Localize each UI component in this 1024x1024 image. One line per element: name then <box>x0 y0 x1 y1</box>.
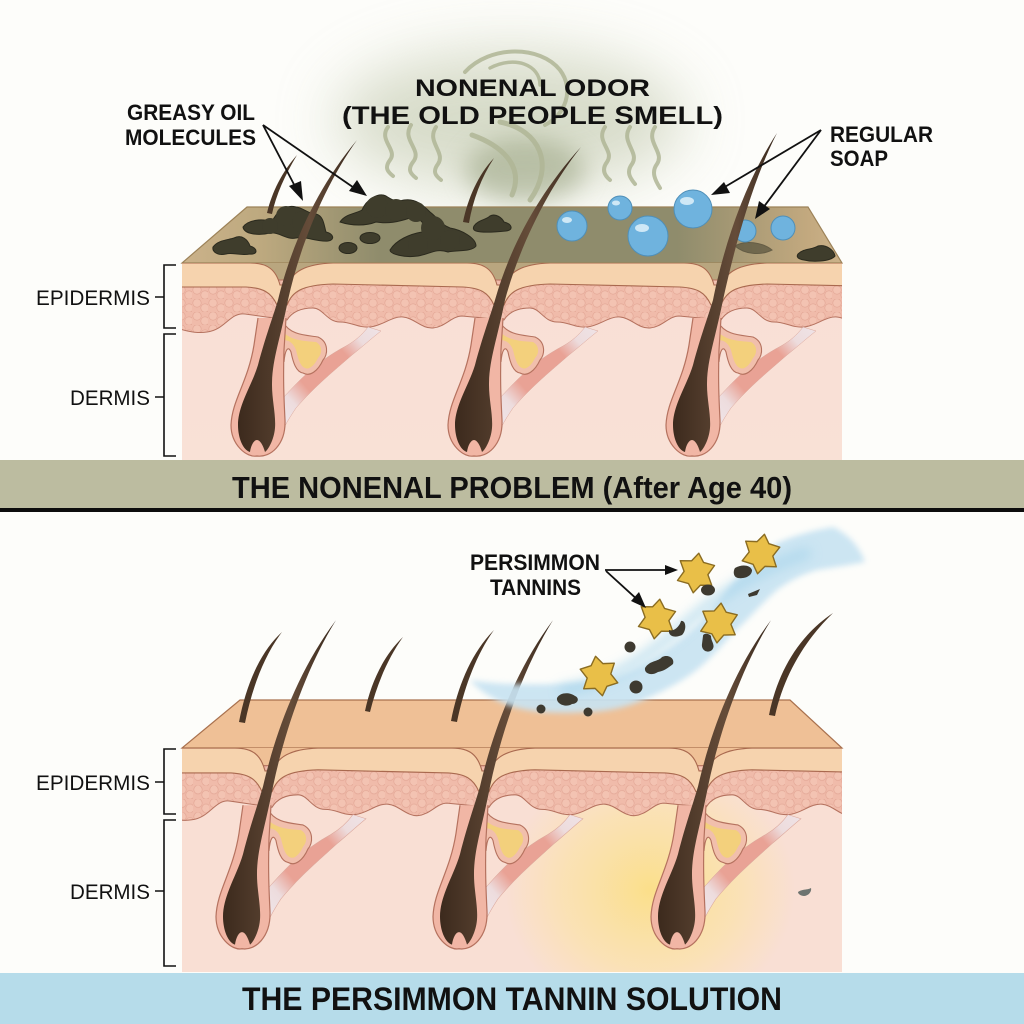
layer labels top: DERMIS <box>70 387 150 410</box>
label: regular soap: REGULAR <box>830 122 933 147</box>
odor haze <box>335 50 685 202</box>
skin top surface with oily film <box>182 207 842 303</box>
small hairs <box>267 155 494 223</box>
arrows: greasy oil <box>263 125 367 201</box>
tannin stars <box>578 531 782 699</box>
banner: the persimmon tannin solution: THE PERSIMMON TANNIN SOLUTION <box>242 981 782 1017</box>
oil blobs: greasy oil molecules <box>213 195 835 261</box>
dermis layer <box>182 785 842 972</box>
small hairs <box>239 613 833 723</box>
dermis layer <box>182 300 842 460</box>
label: persimmon tannins: PERSIMMON <box>470 550 600 575</box>
label: regular soap: SOAP <box>830 146 888 171</box>
odor wavy lines <box>385 51 660 200</box>
yellow healing glow <box>520 796 780 972</box>
skin cross-section with follicles <box>182 263 842 457</box>
divider <box>0 508 1024 512</box>
layer labels bottom: DERMIS <box>70 881 150 904</box>
label: regular soap <box>830 122 933 171</box>
layer labels top: EPIDERMIS <box>36 287 150 310</box>
label: persimmon tannins: TANNINS <box>490 575 581 600</box>
layer labels top <box>36 265 176 456</box>
banner: the nonenal problem <box>0 460 1024 508</box>
skin cross-section with follicles <box>182 748 842 950</box>
banner: the nonenal problem: THE NONENAL PROBLEM (After Age 40) <box>232 470 792 505</box>
label: greasy oil molecules <box>125 100 256 150</box>
dark oil particles being removed <box>536 566 811 896</box>
hair shafts <box>238 133 777 452</box>
layer labels bottom <box>36 749 176 966</box>
panel: the nonenal problem <box>180 23 843 460</box>
hair shafts <box>223 620 771 945</box>
clean skin top surface <box>182 700 842 788</box>
title: nonenal odor: NONENAL ODOR <box>415 75 650 102</box>
blue cleansing stream <box>470 527 865 713</box>
banner: the persimmon tannin solution <box>0 973 1024 1024</box>
soap bubbles <box>557 190 795 256</box>
panel: the persimmon tannin solution <box>180 525 866 972</box>
arrows: regular soap <box>711 130 821 219</box>
arrows: persimmon tannins <box>605 565 678 608</box>
label: greasy oil molecules: MOLECULES <box>125 125 256 150</box>
label: persimmon tannins <box>470 550 600 600</box>
title: nonenal odor <box>342 75 723 130</box>
label: greasy oil molecules: GREASY OIL <box>127 100 255 125</box>
title: nonenal odor: (THE OLD PEOPLE SMELL) <box>342 102 723 130</box>
layer labels bottom: EPIDERMIS <box>36 772 150 795</box>
